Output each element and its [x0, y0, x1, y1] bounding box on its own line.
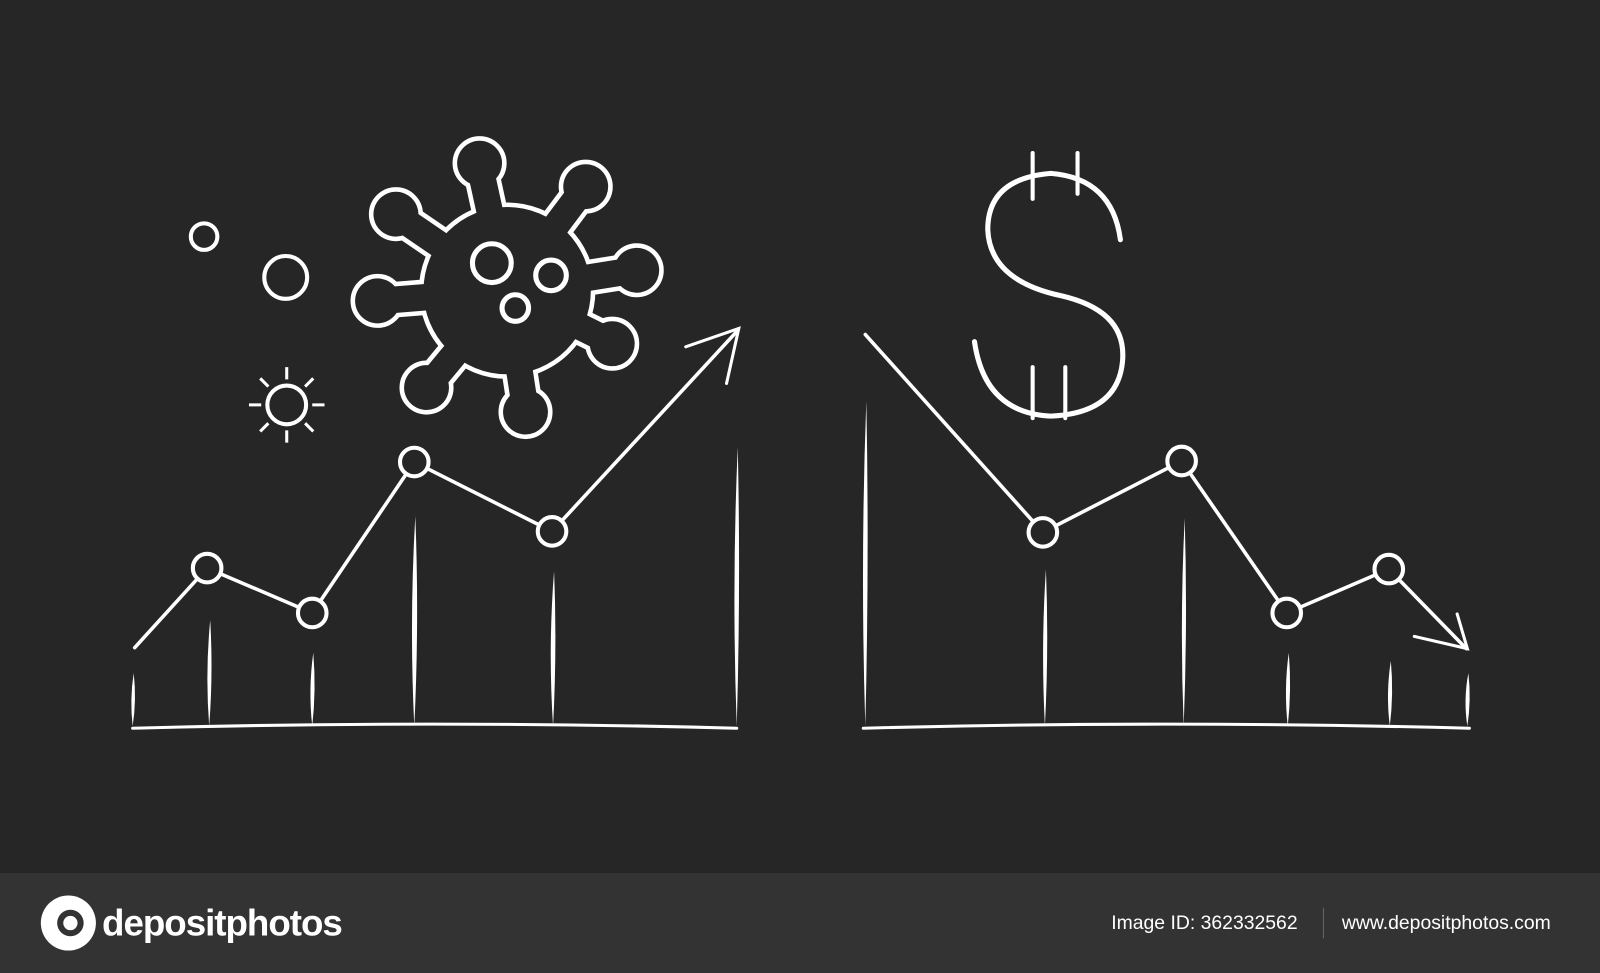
icon: virus particles	[191, 223, 324, 443]
falling line with arrow	[865, 335, 1466, 649]
icon: dollar sign	[974, 153, 1123, 418]
data points	[1029, 447, 1403, 627]
rising line with arrow	[135, 330, 738, 648]
bars	[131, 447, 739, 726]
footer image id: Image ID: 362332562	[1111, 912, 1298, 934]
right chart: falling economy	[863, 335, 1470, 728]
baseline	[863, 724, 1469, 728]
footer bar	[0, 873, 1600, 973]
baseline	[133, 724, 737, 728]
footer url: www.depositphotos.com	[1341, 912, 1551, 934]
footer logo	[41, 895, 342, 951]
icon: small virus	[249, 367, 324, 443]
data points	[193, 448, 566, 627]
icon: big coronavirus	[355, 141, 659, 434]
bars	[863, 401, 1470, 726]
left chart: rising cases	[131, 328, 739, 728]
footer logo: depositphotos	[102, 902, 342, 943]
